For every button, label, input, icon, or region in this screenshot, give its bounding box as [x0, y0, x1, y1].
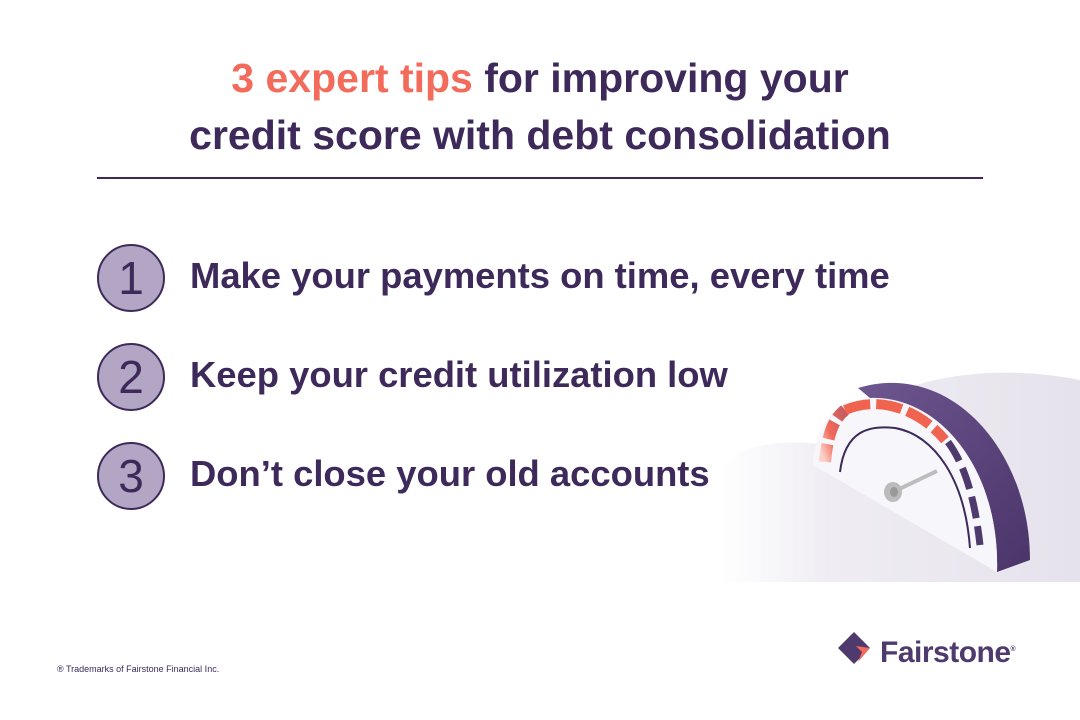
- footnote: ® Trademarks of Fairstone Financial Inc.: [57, 664, 219, 674]
- title: credit score with debt consolidation: [189, 112, 891, 158]
- title: 3 expert tips for improving your: [231, 55, 849, 101]
- tip 2: [97, 343, 728, 411]
- tip 1: Make your payments on time, every time: [190, 255, 890, 296]
- tip 2: 2: [118, 351, 144, 403]
- logo: Fairstone: Fairstone®: [880, 636, 1015, 669]
- tip 3: [97, 442, 710, 510]
- title: [189, 55, 891, 158]
- tip 1: [97, 244, 890, 312]
- tip 2: Keep your credit utilization low: [190, 354, 728, 395]
- tip 3: 3: [118, 450, 144, 502]
- tip 3: Don’t close your old accounts: [190, 453, 710, 494]
- logo: Fairstone: [838, 632, 1016, 669]
- tip 1: 1: [118, 252, 144, 304]
